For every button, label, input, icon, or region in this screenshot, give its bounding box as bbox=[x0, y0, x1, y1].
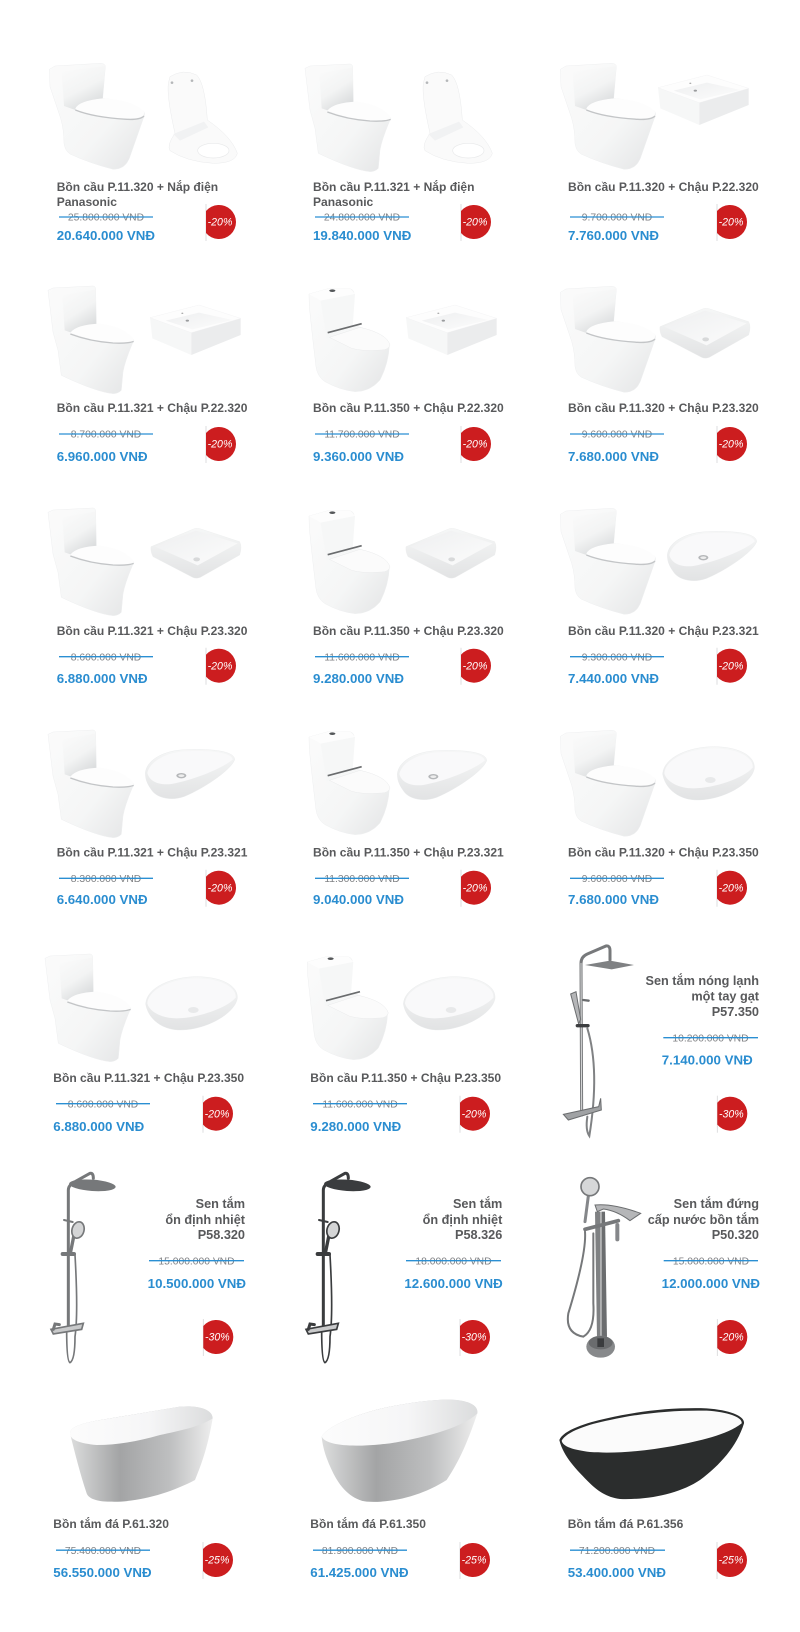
product: shower P58.320 bbox=[51, 1173, 246, 1363]
new price: 9.040.000 VNĐ bbox=[313, 892, 404, 907]
product: P.11.320 + seat bbox=[49, 63, 237, 243]
old price: 9.700.000 VND bbox=[582, 213, 652, 224]
product name: P57.350 bbox=[712, 1005, 759, 1019]
new price: 10.500.000 VNĐ bbox=[148, 1276, 246, 1291]
product: P.11.350 + P.23.321 bbox=[309, 731, 504, 907]
product name: Bồn tắm đá P.61.356 bbox=[568, 1516, 684, 1531]
new price: 6.640.000 VNĐ bbox=[57, 892, 148, 907]
product: bathtub P.61.350 bbox=[310, 1400, 490, 1580]
product image: toilet and square basin bbox=[309, 288, 497, 392]
product: P.11.321 + P.23.321 bbox=[48, 730, 248, 907]
product name: Bồn cầu P.11.350 + Chậu P.22.320 bbox=[313, 401, 504, 415]
product name: Sen tắm bbox=[453, 1197, 502, 1211]
product: bathtub P.61.320 bbox=[53, 1406, 233, 1580]
new price: 7.680.000 VNĐ bbox=[568, 892, 659, 907]
product name: Bồn cầu P.11.320 + Chậu P.22.320 bbox=[568, 180, 759, 194]
old price: 25.800.000 VND bbox=[68, 213, 144, 224]
discount badge bbox=[461, 204, 491, 241]
product image: toilet and oval basin bbox=[560, 730, 754, 836]
product: P.11.350 + P.23.350 bbox=[307, 956, 501, 1134]
old price: 15.000.000 VND bbox=[673, 1256, 749, 1267]
new price: 9.280.000 VNĐ bbox=[313, 671, 404, 686]
old price: 9.600.000 VND bbox=[582, 874, 652, 885]
new price: 61.425.000 VNĐ bbox=[310, 1565, 409, 1580]
new price: 20.640.000 VNĐ bbox=[57, 228, 155, 243]
old price: 11.700.000 VND bbox=[324, 430, 400, 441]
discount badge bbox=[717, 204, 747, 241]
old price: 11.600.000 VND bbox=[324, 652, 400, 663]
discount badge: -25% bbox=[719, 1555, 743, 1567]
new price: 56.550.000 VNĐ bbox=[53, 1565, 152, 1580]
old price: 11.600.000 VND bbox=[322, 1099, 398, 1110]
discount badge bbox=[203, 1096, 233, 1133]
product image: grey bathtub bbox=[70, 1406, 213, 1502]
product: P.11.350 + P.22.320 bbox=[309, 288, 504, 464]
old price: 75.400.000 VND bbox=[65, 1546, 141, 1557]
product name: P58.326 bbox=[455, 1228, 502, 1242]
product name: Sen tắm đứng bbox=[674, 1197, 759, 1211]
discount badge: -20% bbox=[719, 882, 743, 894]
product: P.11.321 + P.22.320 bbox=[48, 286, 248, 464]
product image: black bathtub bbox=[559, 1408, 744, 1499]
product image: toilet and square basin bbox=[560, 63, 749, 169]
product image: toilet and egg basin bbox=[48, 730, 235, 838]
discount badge bbox=[206, 204, 236, 241]
product image: shower set bbox=[563, 946, 634, 1136]
product image: toilet and rectangular basin bbox=[560, 286, 750, 392]
product image: toilet and oval basin bbox=[307, 956, 495, 1060]
discount badge bbox=[461, 870, 491, 907]
product name: Bồn cầu P.11.350 + Chậu P.23.321 bbox=[313, 846, 504, 860]
discount badge: -20% bbox=[463, 217, 487, 229]
product image: toilet and rectangular basin bbox=[309, 510, 496, 614]
old price: 24.800.000 VND bbox=[324, 213, 400, 224]
discount badge: -20% bbox=[208, 660, 232, 672]
discount badge: -20% bbox=[208, 882, 232, 894]
discount badge bbox=[461, 426, 491, 463]
product name: Bồn cầu P.11.350 + Chậu P.23.320 bbox=[313, 624, 504, 638]
discount badge bbox=[206, 426, 236, 463]
discount badge bbox=[717, 870, 747, 907]
discount badge: -30% bbox=[205, 1332, 230, 1344]
product: P.11.321 + P.23.320 bbox=[48, 508, 248, 686]
product image: toilet and rectangular basin bbox=[48, 508, 241, 616]
product name: Bồn cầu P.11.321 + Chậu P.23.350 bbox=[53, 1071, 244, 1085]
product name: Bồn cầu P.11.321 + Chậu P.23.320 bbox=[57, 624, 248, 638]
new price: 7.760.000 VNĐ bbox=[568, 228, 659, 243]
product name: một tay gạt bbox=[691, 989, 760, 1003]
product name: Bồn cầu P.11.321 + Chậu P.22.320 bbox=[57, 401, 248, 415]
old price: 8.700.000 VND bbox=[71, 430, 141, 441]
new price: 53.400.000 VNĐ bbox=[568, 1565, 666, 1580]
product image: grey oval bathtub bbox=[322, 1400, 477, 1502]
discount badge bbox=[717, 1096, 747, 1133]
product name: Panasonic bbox=[57, 195, 117, 209]
old price: 9.300.000 VND bbox=[582, 652, 652, 663]
new price: 7.680.000 VNĐ bbox=[568, 449, 659, 464]
discount badge bbox=[460, 1096, 490, 1133]
new price: 19.840.000 VNĐ bbox=[313, 228, 412, 243]
discount badge: -20% bbox=[462, 1108, 486, 1120]
old price: 15.000.000 VND bbox=[158, 1256, 235, 1267]
product name: Bồn tắm đá P.61.320 bbox=[53, 1516, 169, 1531]
product name: Bồn cầu P.11.320 + Chậu P.23.320 bbox=[568, 401, 759, 415]
product image: toilet and egg basin bbox=[309, 731, 487, 835]
product name: P58.320 bbox=[198, 1228, 245, 1242]
product image: shower set bbox=[51, 1173, 116, 1363]
product image: toilet and oval basin bbox=[45, 954, 237, 1062]
discount badge: -25% bbox=[462, 1555, 486, 1567]
discount badge: -25% bbox=[205, 1555, 229, 1567]
new price: 6.880.000 VNĐ bbox=[53, 1119, 145, 1134]
new price: 7.440.000 VNĐ bbox=[568, 671, 659, 686]
new price: 7.140.000 VNĐ bbox=[662, 1052, 753, 1068]
product image: black shower set bbox=[306, 1173, 371, 1363]
old price: 8.600.000 VND bbox=[71, 652, 141, 663]
discount badge: -20% bbox=[463, 882, 487, 894]
discount badge bbox=[203, 1542, 233, 1579]
product name: Bồn tắm đá P.61.350 bbox=[310, 1516, 426, 1531]
discount badge: -20% bbox=[463, 439, 487, 451]
discount badge: -20% bbox=[463, 660, 487, 672]
discount badge bbox=[717, 1319, 747, 1356]
product name: Bồn cầu P.11.320 + Nắp điện bbox=[57, 180, 218, 194]
product image: toilet and electric seat bbox=[305, 64, 492, 172]
product name: Sen tắm bbox=[196, 1197, 245, 1211]
product: shower P57.350 bbox=[563, 946, 760, 1136]
new price: 12.600.000 VNĐ bbox=[404, 1276, 503, 1291]
product name: cấp nước bồn tắm bbox=[648, 1212, 759, 1227]
new price: 6.960.000 VNĐ bbox=[57, 449, 148, 464]
discount badge bbox=[460, 1542, 490, 1579]
product: P.11.321 + P.23.350 bbox=[45, 954, 244, 1134]
product name: Bồn cầu P.11.350 + Chậu P.23.350 bbox=[310, 1071, 501, 1085]
product name: ổn định nhiệt bbox=[165, 1213, 246, 1227]
product: P.11.320 + P.23.320 bbox=[560, 286, 759, 464]
product name: P50.320 bbox=[712, 1228, 759, 1242]
product: P.11.350 + P.23.320 bbox=[309, 510, 504, 686]
discount badge bbox=[461, 648, 491, 685]
discount badge: -20% bbox=[208, 439, 232, 451]
old price: 10.200.000 VND bbox=[672, 1033, 749, 1044]
product name: Sen tắm nóng lạnh bbox=[646, 974, 759, 988]
product: P.11.320 + P.22.320 bbox=[560, 63, 759, 243]
discount badge bbox=[717, 1542, 747, 1579]
discount badge: -30% bbox=[462, 1332, 486, 1344]
product: P.11.320 + P.23.321 bbox=[560, 508, 759, 686]
product image: freestanding bath faucet bbox=[568, 1178, 641, 1358]
discount badge bbox=[203, 1319, 233, 1356]
product image: toilet and square basin bbox=[48, 286, 241, 394]
discount badge: -20% bbox=[719, 439, 743, 451]
old price: 71.200.000 VND bbox=[579, 1546, 655, 1557]
product name: Bồn cầu P.11.320 + Chậu P.23.350 bbox=[568, 846, 759, 860]
new price: 9.360.000 VNĐ bbox=[313, 449, 404, 464]
old price: 8.300.000 VND bbox=[71, 874, 141, 885]
discount badge: -20% bbox=[719, 1332, 744, 1344]
discount badge: -20% bbox=[719, 660, 743, 672]
product name: Bồn cầu P.11.321 + Chậu P.23.321 bbox=[57, 846, 248, 860]
product image: toilet and electric seat bbox=[49, 63, 237, 169]
discount badge: -20% bbox=[205, 1108, 229, 1120]
discount badge bbox=[717, 648, 747, 685]
product: bath mixer P50.320 bbox=[568, 1178, 760, 1358]
old price: 9.600.000 VND bbox=[582, 430, 652, 441]
product name: ổn định nhiệt bbox=[423, 1213, 503, 1227]
product: P.11.321 + seat bbox=[305, 64, 492, 243]
product: shower P58.326 bbox=[306, 1173, 503, 1363]
discount badge bbox=[206, 870, 236, 907]
discount badge: -20% bbox=[719, 217, 743, 229]
old price: 8.600.000 VND bbox=[68, 1099, 138, 1110]
new price: 12.000.000 VNĐ bbox=[662, 1276, 760, 1291]
new price: 9.280.000 VNĐ bbox=[310, 1119, 402, 1134]
discount badge bbox=[460, 1319, 490, 1356]
discount badge bbox=[206, 648, 236, 685]
product image: toilet and egg basin bbox=[560, 508, 757, 614]
product: P.11.320 + P.23.350 bbox=[560, 730, 759, 907]
old price: 81.900.000 VND bbox=[322, 1546, 398, 1557]
product name: Bồn cầu P.11.321 + Nắp điện bbox=[313, 180, 474, 194]
product name: Bồn cầu P.11.320 + Chậu P.23.321 bbox=[568, 624, 759, 638]
new price: 6.880.000 VNĐ bbox=[57, 671, 148, 686]
old price: 18.000.000 VND bbox=[415, 1256, 492, 1267]
discount badge: -20% bbox=[208, 217, 232, 229]
product: bathtub P.61.356 bbox=[559, 1408, 747, 1580]
old price: 11.300.000 VND bbox=[324, 874, 400, 885]
product name: Panasonic bbox=[313, 195, 374, 209]
discount badge: -30% bbox=[719, 1108, 744, 1120]
discount badge bbox=[717, 426, 747, 463]
